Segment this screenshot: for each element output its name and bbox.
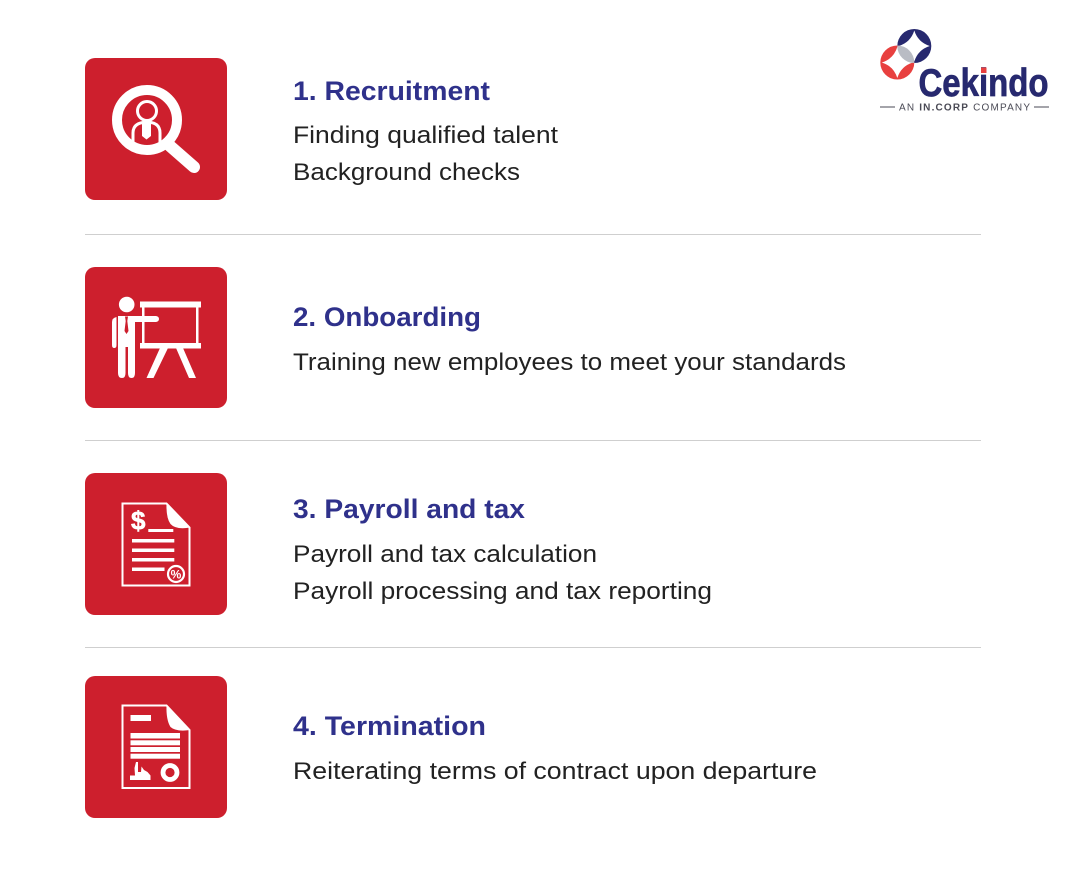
- text: payroll details: Payroll processing and tax reporting: [293, 578, 712, 605]
- heading: 2. Onboarding: 2. Onboarding: [293, 302, 481, 332]
- text: recruitment details: Finding qualified talent: [293, 122, 558, 149]
- text: termination details: Reiterating terms of contract upon departure: [293, 758, 817, 785]
- icon: payroll document: $: [131, 506, 146, 536]
- text: onboarding details: Training new employees to meet your standards: [293, 349, 846, 376]
- logo red dot: [981, 68, 986, 73]
- logo: Cekindo: [880, 29, 1049, 114]
- icon: magnifying glass with person: [85, 58, 227, 200]
- icon: payroll document: [85, 473, 227, 615]
- text: recruitment details: [293, 122, 558, 186]
- icon: presenter at board: [85, 267, 227, 408]
- heading: 4. Termination: 4. Termination: [293, 711, 486, 741]
- text: payroll details: Payroll and tax calculation: [293, 541, 597, 568]
- panel: recruitment: [85, 58, 558, 200]
- logo tagline: AN IN.CORP COMPANY: [899, 102, 1030, 114]
- logo mark: [880, 29, 931, 80]
- icon: payroll document: %: [171, 568, 182, 582]
- text: recruitment details: Background checks: [293, 159, 520, 186]
- panel: payroll and tax: [85, 473, 712, 615]
- icon: contract document: [85, 676, 227, 818]
- heading: 3. Payroll and tax: 3. Payroll and tax: [293, 494, 525, 524]
- heading: 1. Recruitment: 1. Recruitment: [293, 76, 490, 106]
- logo wordmark: Cekindo: [918, 62, 1048, 105]
- text: payroll details: [293, 541, 712, 605]
- panel: termination: [85, 676, 817, 818]
- panel: onboarding: [85, 267, 846, 408]
